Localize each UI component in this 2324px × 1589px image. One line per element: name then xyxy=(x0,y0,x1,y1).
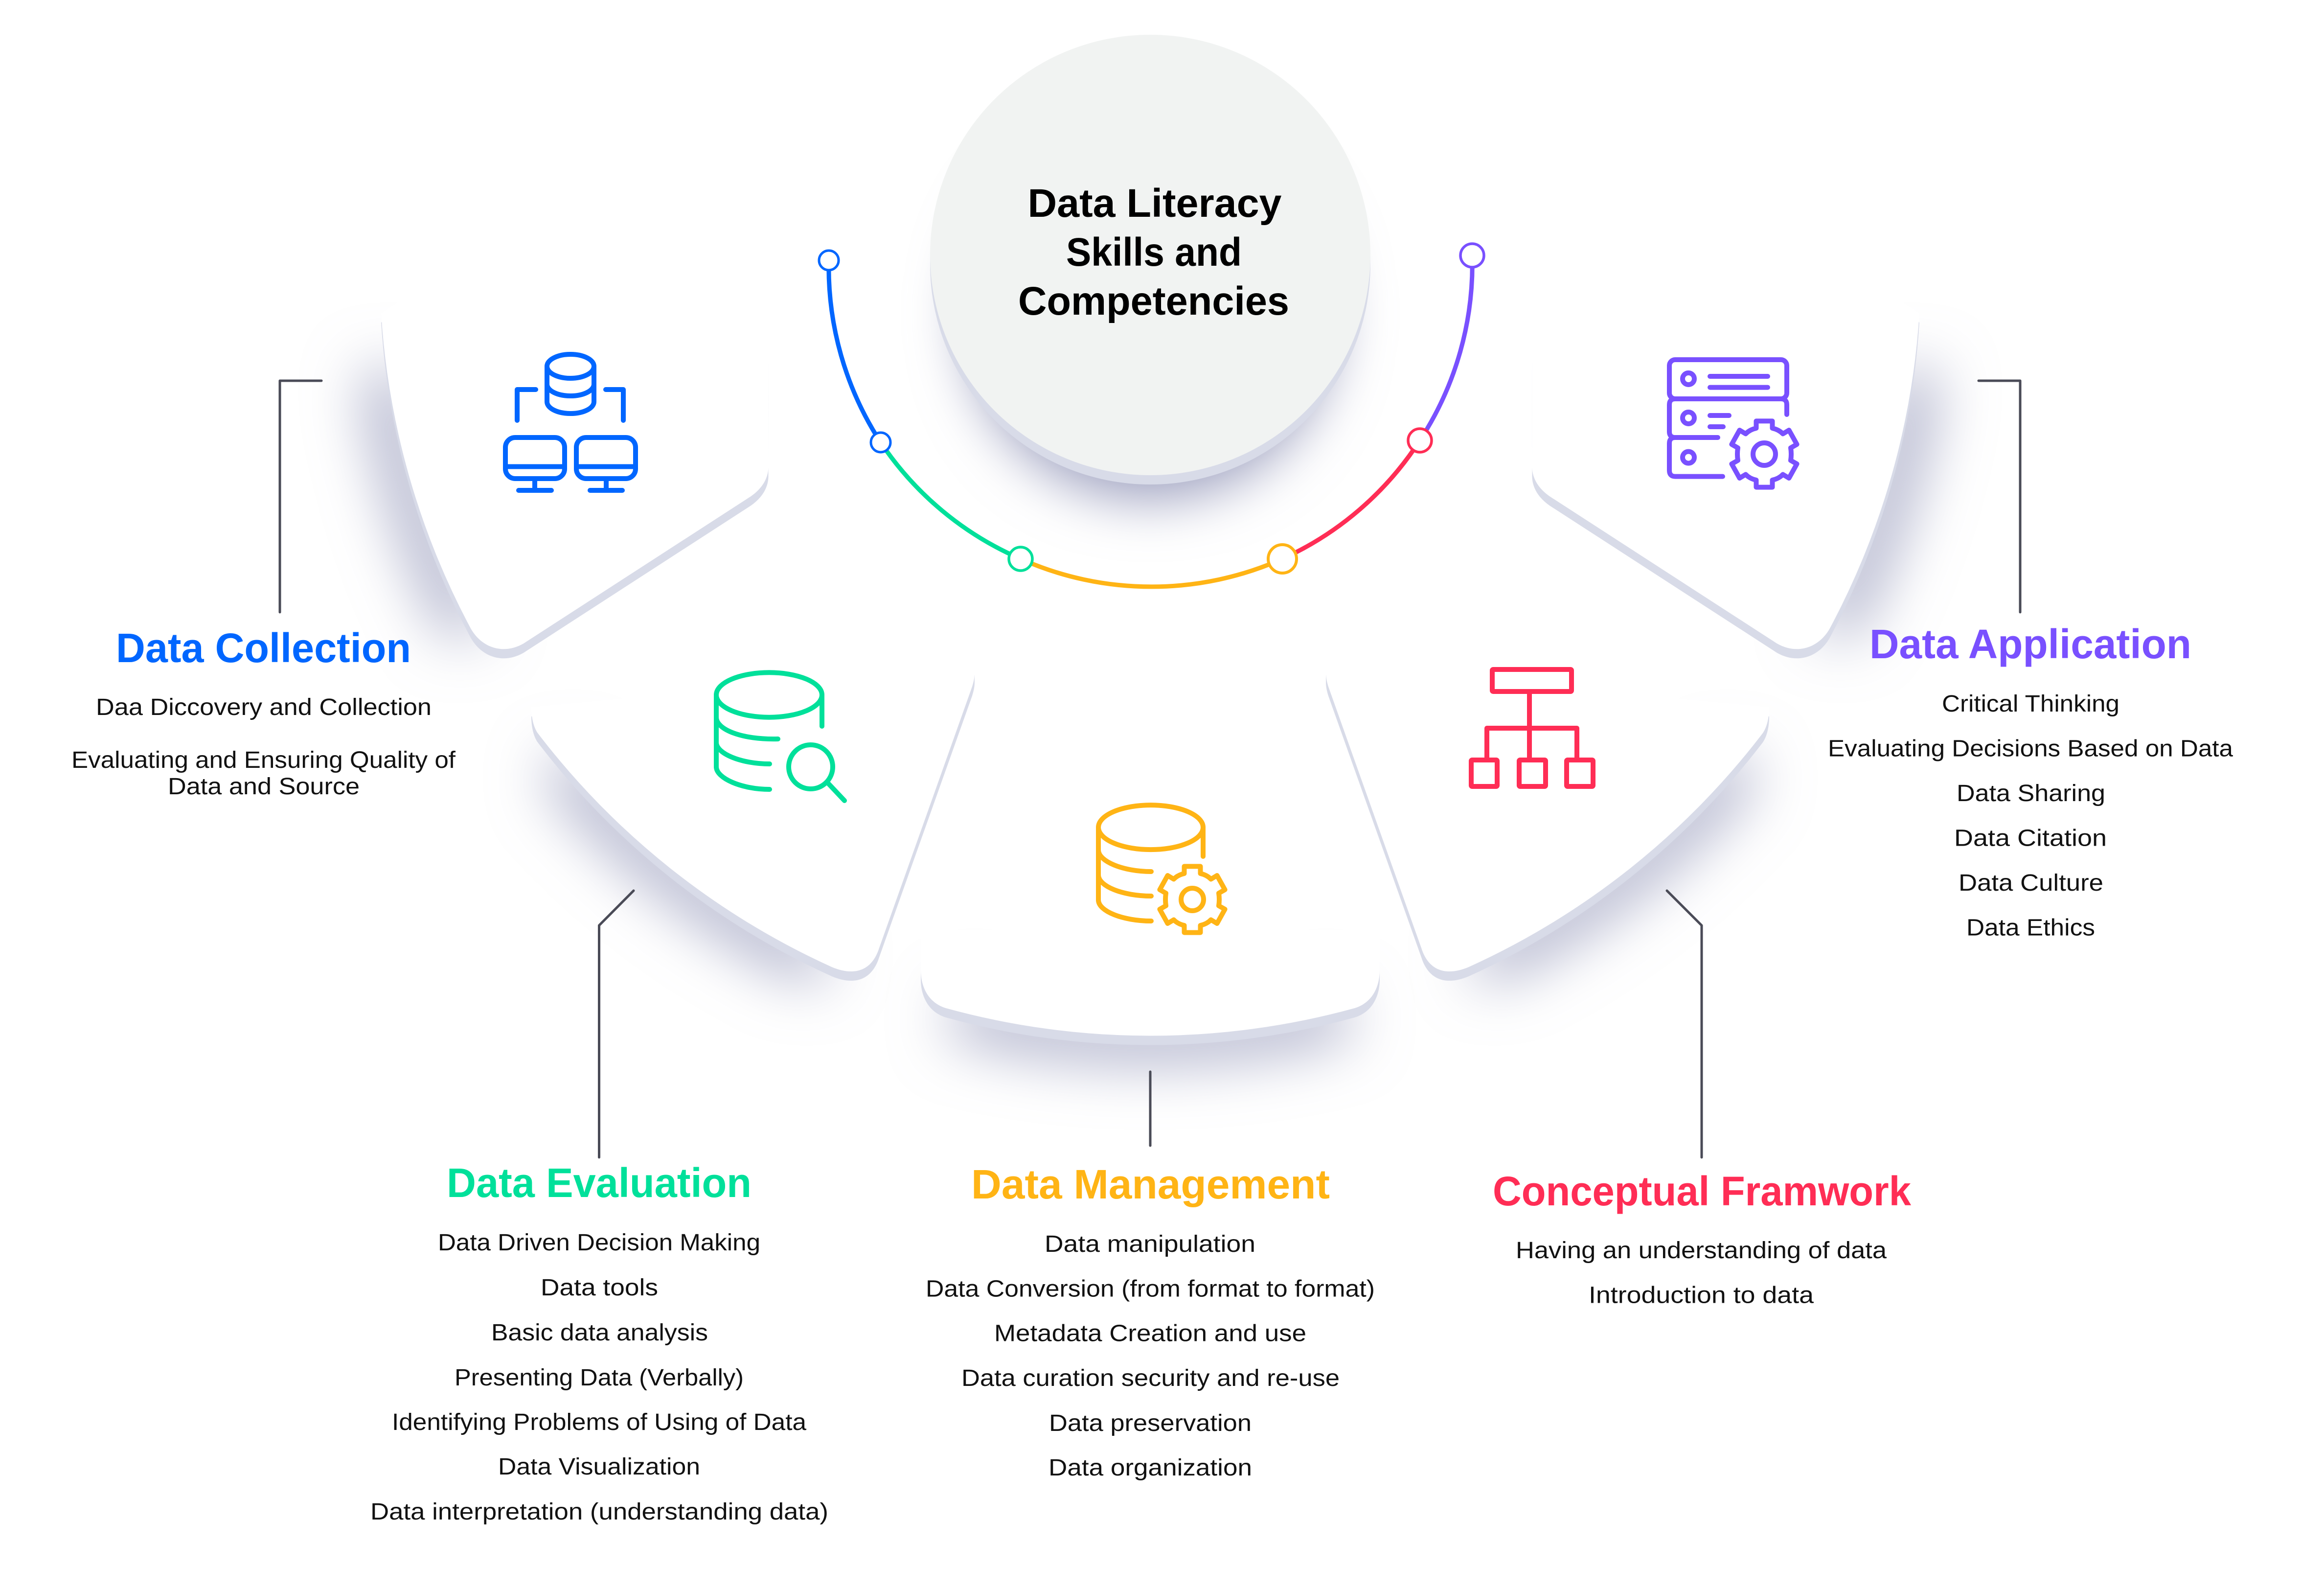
text block: Data Management: Data organization xyxy=(1048,1455,1252,1481)
text block: Data Application: Evaluating Decisions Based on Data xyxy=(1828,736,2233,762)
text block: Data Evaluation: Data tools xyxy=(541,1275,658,1301)
text block: Data Management: Data Conversion (from format to format) xyxy=(926,1276,1375,1302)
icon: database connected to two computers xyxy=(505,354,636,490)
icon: database with gear xyxy=(1098,805,1225,933)
text block: Data Evaluation xyxy=(370,1160,828,1525)
icon: hierarchy chart xyxy=(1471,669,1593,786)
text block: Data Evaluation: Data Driven Decision Making xyxy=(438,1230,760,1256)
panel: Data Collection sector xyxy=(381,245,768,658)
text block: Data Application: Critical Thinking xyxy=(1942,691,2119,717)
callout: Data Management connector xyxy=(1149,1072,1152,1146)
heading: Data Management: Data Management xyxy=(971,1161,1330,1207)
text block: Data Evaluation: Data Visualization xyxy=(498,1454,700,1480)
text block: Data Evaluation: Identifying Problems of Using of Data xyxy=(392,1409,806,1435)
text block: Data Application: Data Sharing xyxy=(1957,781,2105,806)
text block: Data Collection: Data and Source xyxy=(168,774,360,800)
text block: Data Application: Data Citation xyxy=(1954,826,2107,852)
text block: Conceptual Framwork: Having an understanding of data xyxy=(1516,1238,1887,1264)
title: Competencies xyxy=(1018,279,1289,323)
heading: Data Application: Data Application xyxy=(1869,621,2191,667)
heading: Conceptual Framwork: Conceptual Framwork xyxy=(1493,1168,1911,1214)
central circle with title xyxy=(930,35,1370,499)
text block: Data Evaluation: Basic data analysis xyxy=(491,1320,708,1346)
title: Data Literacy xyxy=(1027,181,1282,226)
text block: Data Management: Data preservation xyxy=(1049,1410,1252,1436)
icon: server stack with gear xyxy=(1669,360,1797,487)
callout: Conceptual Framework connector xyxy=(1667,891,1702,1157)
text block: Data Collection: Evaluating and Ensuring Quality of xyxy=(71,747,456,773)
title: Skills and xyxy=(1066,230,1242,275)
text block: Data Collection: Daa Diccovery and Collection xyxy=(96,694,432,720)
text block: Data Application: Data Culture xyxy=(1959,870,2103,896)
text block: Conceptual Framwork xyxy=(1493,1168,1911,1309)
callout: Data Collection connector xyxy=(280,381,321,612)
text block: Conceptual Framwork: Introduction to data xyxy=(1589,1283,1814,1309)
panel: Data Application sector xyxy=(1532,245,1919,658)
text block: Data Collection xyxy=(71,625,456,800)
callout: Data Evaluation connector xyxy=(599,891,634,1157)
text block: Data Management xyxy=(926,1161,1375,1481)
icon: database with magnifier xyxy=(716,672,844,801)
text block: Data Management: Metadata Creation and use xyxy=(994,1320,1306,1347)
panel: Data Evaluation sector xyxy=(531,666,975,981)
text block: Data Management: Data manipulation xyxy=(1045,1231,1255,1257)
callout: Data Application connector xyxy=(1979,381,2020,612)
text block: Data Evaluation: Data interpretation (understanding data) xyxy=(370,1499,828,1525)
title xyxy=(1018,181,1289,323)
text block: Data Application: Data Ethics xyxy=(1966,915,2095,941)
text block: Data Management: Data curation security and re-use xyxy=(961,1365,1340,1391)
panel: Data Management sector xyxy=(921,805,1380,1045)
heading: Data Evaluation: Data Evaluation xyxy=(447,1160,752,1206)
text block: Data Application xyxy=(1828,621,2233,941)
text block: Data Evaluation: Presenting Data (Verbally) xyxy=(455,1365,744,1391)
multicolour arc with nodes xyxy=(819,244,1484,587)
heading: Data Collection: Data Collection xyxy=(116,625,411,671)
panel: Conceptual Framework sector xyxy=(1326,666,1769,981)
